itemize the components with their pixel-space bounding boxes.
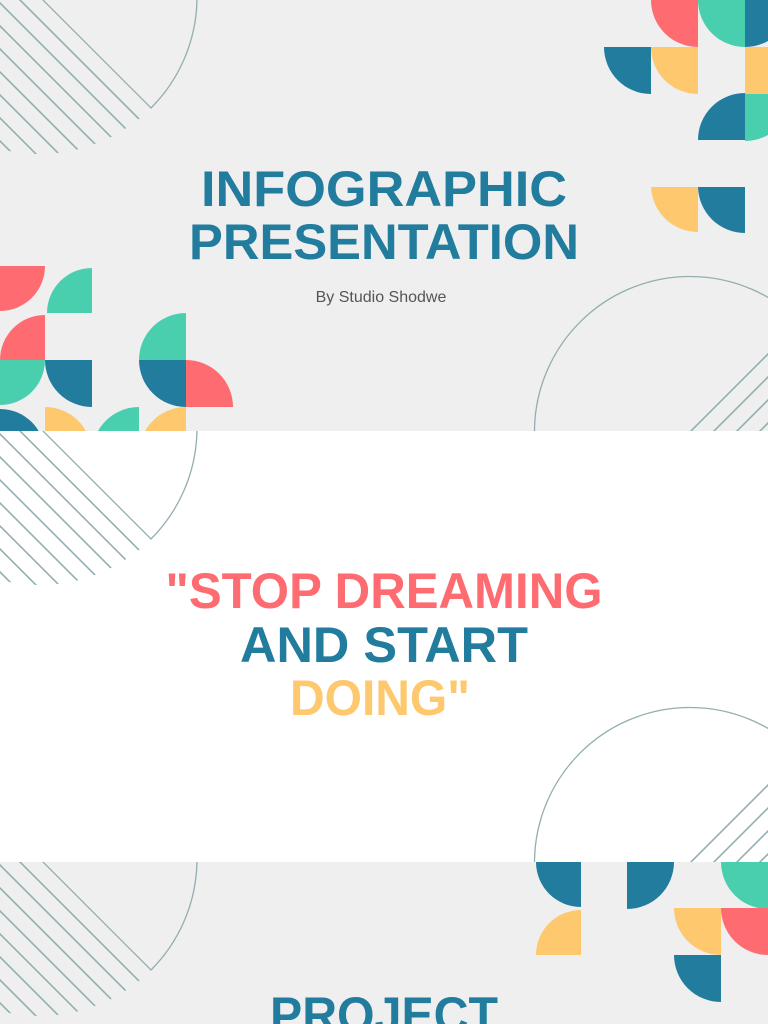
shapes: top-right cluster [604,0,768,233]
title: PRESENTATION [189,214,579,270]
quote [166,563,602,726]
subtitle: By Studio Shodwe [316,289,446,306]
shapes: left cluster [0,266,233,454]
title [189,161,579,270]
panel: quote slide [0,211,768,1024]
quote: "STOP DREAMING [166,563,602,619]
quote: DOING" [290,670,470,726]
title: INFOGRAPHIC [201,161,567,217]
panel: project slide [0,642,768,1024]
shapes: bottom-right cluster [536,862,768,1002]
quote: AND START [240,617,528,673]
panel: title slide [0,0,768,816]
